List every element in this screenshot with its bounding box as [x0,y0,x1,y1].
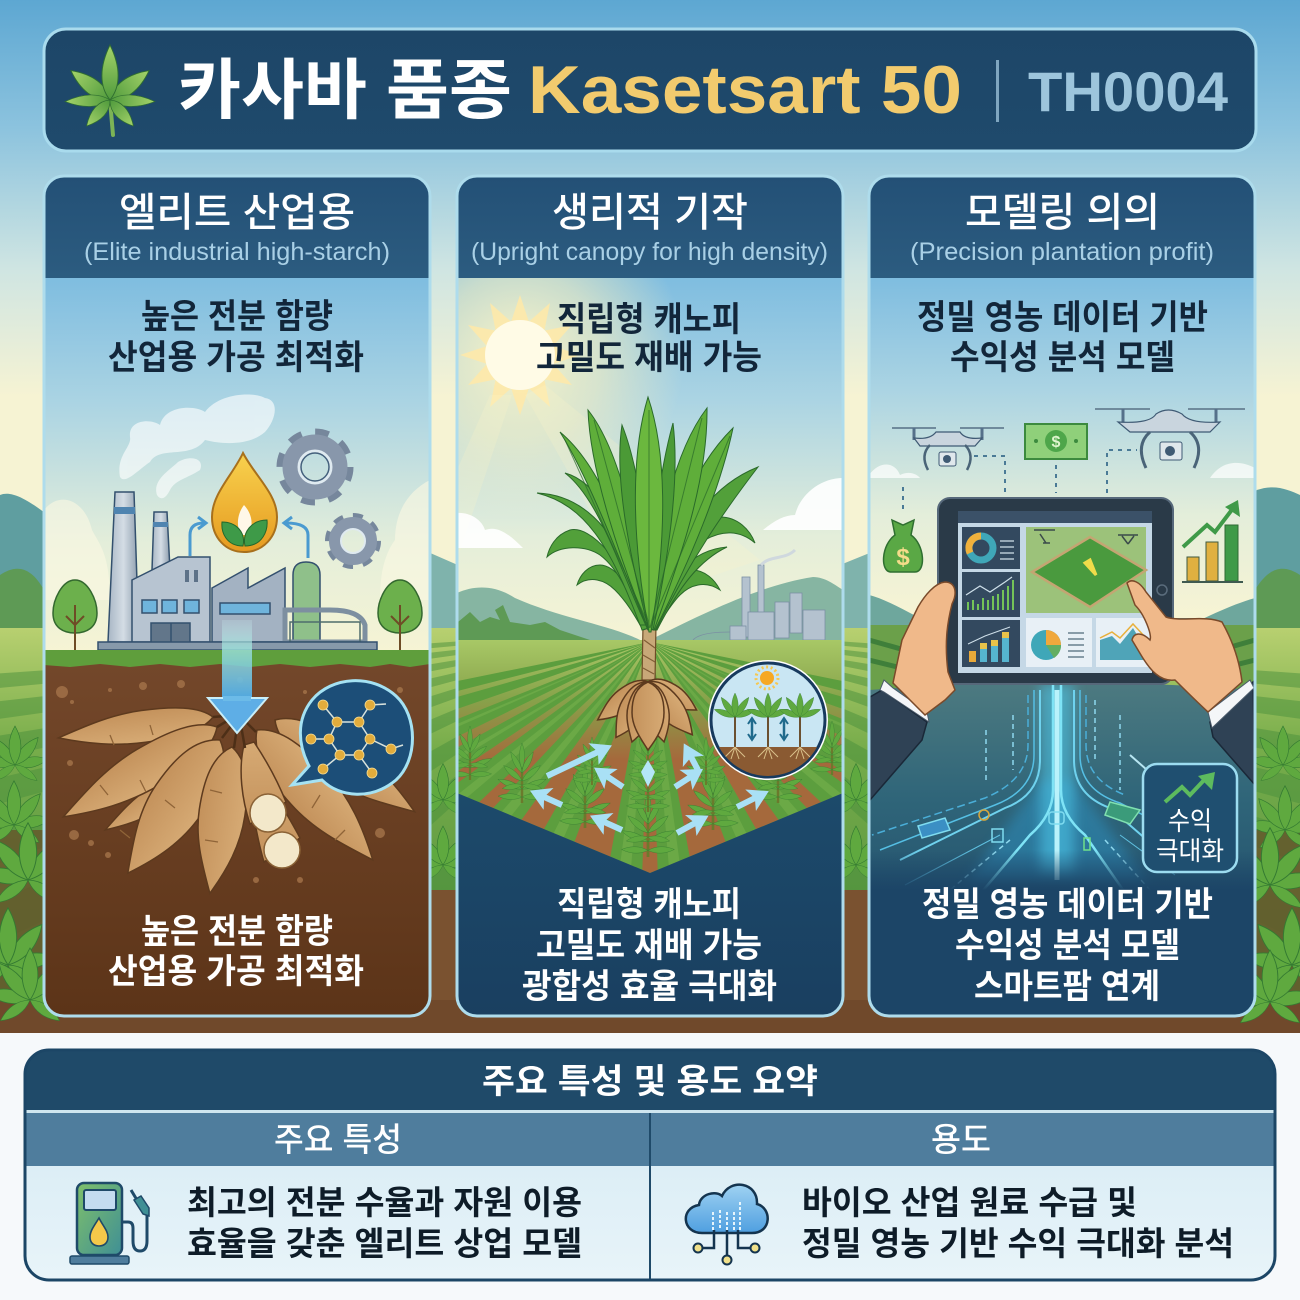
icon: money bag: $ [896,544,910,571]
panel: elite industrial [44,176,430,1016]
subheading: (Precision plantation profit) [910,238,1214,266]
heading: 생리적 기작 [552,180,748,238]
left hand and sleeve [870,582,955,800]
sun [458,278,673,511]
tree left [53,580,97,650]
summary table [25,1050,1275,1280]
column: key traits: 주요 특성 [274,1113,402,1161]
table title: 주요 특성 및 용도 요약 [482,1054,818,1103]
dashed connectors [903,450,1137,512]
bottom text: 높은 전분 함량 [141,904,333,953]
clouds and hills [869,463,1255,700]
callout: starch molecule [292,681,412,794]
smoke cloud [119,395,275,498]
traits text: 최고의 전분 수율과 자원 이용 [187,1176,582,1224]
uses text: 바이오 산업 원료 수급 및 [802,1176,1137,1224]
bottom text [108,904,364,993]
cassava tubers [53,701,426,897]
icon: growth chart [1182,500,1243,582]
top text [917,290,1208,379]
traits text: 효율을 갖춘 엘리트 상업 모델 [187,1217,582,1265]
data streams [872,685,1176,888]
dashboard panels [962,527,1020,667]
icon: fuel pump [70,1183,149,1264]
callout: maximize profit: 극대화 [1156,831,1224,868]
arrows to drop [190,517,308,558]
panel header [44,176,430,278]
title banner [44,29,1256,151]
bottom text: 스마트팜 연계 [974,959,1160,1008]
top text: 수익성 분석 모델 [950,330,1175,379]
icon: fuel drop [212,453,277,552]
uses text [802,1176,1234,1265]
column: uses: 용도 [931,1113,991,1161]
top text: 직립형 캐노피 [557,292,741,341]
top text: 정밀 영농 데이터 기반 [917,290,1208,339]
bottom text: 수익성 분석 모델 [955,918,1180,967]
distant factory [693,550,825,640]
hills [457,577,843,640]
heading: 엘리트 산업용 [119,180,355,238]
spacing arrows [542,751,757,833]
banknote [1025,424,1087,459]
bottom text: 고밀도 재배 가능 [536,918,762,967]
inset: density diagram [708,660,828,780]
top text [108,289,364,379]
clouds [457,478,843,548]
icon: gear small [329,517,377,565]
arrow down into soil [208,620,267,733]
panel: physiological mechanism [456,174,844,1018]
uses text: 정밀 영농 기반 수익 극대화 분석 [802,1217,1234,1265]
subheading: (Upright canopy for high density) [471,238,828,266]
variety code: TH0004 [1028,60,1228,123]
top text: 높은 전분 함량 [141,289,333,338]
bottom text: 정밀 영농 데이터 기반 [922,877,1213,926]
drone left [892,428,1004,470]
right hand and sleeve [1127,581,1255,785]
title text: 카사바 품종 [178,37,512,133]
background landscape [0,0,1300,1033]
tablet [938,498,1173,684]
bottom text [522,877,777,1008]
traits text [187,1176,582,1265]
central cassava plant [537,397,758,680]
top text [536,292,762,379]
crop field [458,640,842,873]
icon: cassava leaf [65,45,155,135]
central plant tubers [596,678,698,752]
bottom text: 광합성 효율 극대화 [522,959,777,1008]
heading: 모델링 의의 [965,180,1160,238]
bottom text: 산업용 가공 최적화 [108,944,364,993]
soil specks [56,677,403,883]
subheading: (Elite industrial high-starch) [84,238,390,266]
top text: 산업용 가공 최적화 [108,330,364,379]
data icons [918,802,1140,850]
callout: maximize profit: 수익 [1168,801,1212,838]
icon: cloud data [686,1185,768,1264]
banknote: $ [1052,434,1061,451]
factory [98,492,377,650]
variety name: Kasetsart 50 [528,52,962,128]
drone right [1095,409,1245,468]
tree right [378,580,422,650]
panel: modeling significance [869,176,1255,1016]
top text: 고밀도 재배 가능 [536,330,762,379]
icon: money bag [884,520,922,572]
callout: maximize profit [1130,755,1237,872]
bottom text: 직립형 캐노피 [557,877,741,926]
diamond marker [641,760,655,787]
bottom text [922,877,1213,1008]
icon: gear large [282,434,348,500]
